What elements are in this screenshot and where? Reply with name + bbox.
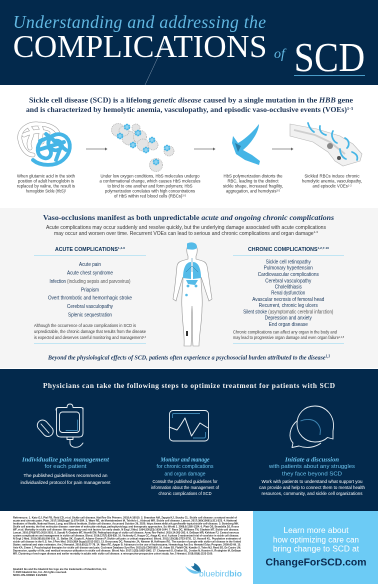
references: sickle cell disease in the U.S. Am J Prev Med. 2010;38(4 Suppl):S512-S521. 13. Brousseau DC, Panepinto JA, Nimmer M, Hoffmann RG. The number of people with sickle-cell disease in the United xyxy=(13,540,242,544)
acute note: Although the occurrence of acute complications in SCD is xyxy=(34,323,136,328)
step: monitor and manage: and organ damage xyxy=(164,471,206,477)
header banner xyxy=(0,0,378,85)
chronic list xyxy=(243,260,334,328)
chronic list: Silent stroke (asymptomatic cerebral infarction) xyxy=(243,309,334,315)
acute note: is expected and deserves careful monitoring and management1,3 xyxy=(34,335,147,340)
panel: vaso-occlusions xyxy=(0,208,378,368)
step 4 caption: Sickled RBCs induce chronic xyxy=(304,173,360,178)
step: monitor and manage: chronic complications of SCD xyxy=(158,491,212,496)
references: acute and chronic pain. Pain. 2017;158(Suppl 1):S79-S84. 3. Ware RE, de Montalembert M, Tshilolo L, Abboud MR. Sickle cell disease. Lancet. 2017;390(10091):311-323. 4. National xyxy=(13,520,237,522)
acute heading: ACUTE COMPLICATIONS1,4-6 xyxy=(55,246,125,253)
legal footer: © 2020 bluebird bio, Inc. All rights reserved. xyxy=(13,571,67,574)
chronic note: may lead to progressive organ damage and even organ failure1,2,8 xyxy=(233,335,345,340)
chronic list: Avascular necrosis of femoral head xyxy=(252,297,324,303)
intro text: Sickle cell disease (SCD) is a lifelong genetic disease caused by a single mutation in the HBB gene xyxy=(29,96,353,104)
step: monitor and manage: information about the management of xyxy=(151,485,220,490)
icon: speech bubbles xyxy=(290,406,334,448)
step 4 caption: hemolytic anemia, vasculopathy, xyxy=(302,178,362,183)
legal footer: bluebird bio and the bluebird bio logo are the trademarks of bluebird bio, Inc. xyxy=(13,568,107,571)
psychosocial burden statement: Beyond the physiological effects of SCD, patients often experience a psychosocial burden attributed to the disease1,3 xyxy=(47,353,330,362)
step 1 caption xyxy=(17,173,76,193)
step 4 caption xyxy=(302,173,362,188)
references: N Engl J Med. 2019;381(6):509-519. 11. Ballas SK, Gupta K, Adams-Graves P. Sickle cell pain: a critical reappraisal. Blood. 2012;120(18):3723-3731. 12. Hassell KL. Population estimates of xyxy=(13,538,241,540)
acute note xyxy=(34,323,147,340)
chronic list: Recurrent, chronic leg ulcers xyxy=(259,303,318,309)
acute list: Overt thrombotic and hemorrhagic stroke xyxy=(48,296,132,302)
icon: patient monitor xyxy=(169,410,208,441)
step 1 caption: hemoglobin Sickle (HbS)3 xyxy=(26,188,66,193)
call to action box: bring change to SCD at xyxy=(273,545,360,554)
icon: human body xyxy=(173,242,212,346)
step 3 caption: HbS polymerization distorts the xyxy=(224,173,283,178)
acute list: Infection (including sepsis and parvovirus) xyxy=(50,279,131,285)
call to action box: ChangeForSCD.com xyxy=(266,558,367,568)
panel: physician steps xyxy=(0,369,378,511)
intro text xyxy=(26,96,353,114)
step 1 caption: replaced by valine, the result is xyxy=(17,183,75,188)
intro text: and is characterized by hemolytic anemia, vasculopathy, and episodic vaso-occlusive events (VOEs) 1-3 xyxy=(26,106,353,114)
references: system complications and management in sickle cell disease. Blood. 2016;127(7):829-838. 10. Vichinsky E, Hoppe CC, Ataga KI, et al. A phase 3 randomized trial of voxelotor in sickle cell disease. xyxy=(13,534,239,538)
step: initiate a discussion: can provide and help to connect them to mental health xyxy=(259,485,365,490)
call to action box: how optimizing care can xyxy=(273,535,359,544)
acute list: Acute pain xyxy=(79,262,101,268)
legal footer: SCD-US-00090 11/2020 xyxy=(13,575,48,577)
call to action box xyxy=(253,511,378,584)
chronic list: Renal dysfunction xyxy=(271,291,305,297)
references: Sickle cell anemia, the first molecular disease: overview of molecular etiology, pathophysiology, and therapeutic approaches. Sci World J. 2008;8:1295-1324. 6. Platt OS, Brambilla DJ, Rosse xyxy=(13,526,240,528)
icon: hemoglobin molecule xyxy=(20,124,70,165)
references: WF, et al. Mortality in sickle cell disease: life expectancy and risk factors for early death. N Engl J Med. 1994;330(23):1639-1644. 7. Rees DC, Williams TN, Gladwin MT. Sickle-cell disease. xyxy=(13,528,239,532)
icon: blood vessel with sickled cells xyxy=(290,123,362,166)
panel heading: Vaso-occlusions manifest as both unpredictable acute and ongoing chronic complications xyxy=(43,213,334,222)
acute list: Cerebral vasculopathy xyxy=(67,304,113,310)
chronic note xyxy=(233,330,345,340)
acute list xyxy=(48,262,132,318)
step: monitor and manage: Consult the published guidelines for xyxy=(152,479,218,484)
icon: IV bag and pill xyxy=(35,404,83,447)
references: References: 1. Kato GJ, Piel FB, Reid CD, et al. Sickle cell disease. Nat Rev Dis Primers. 2018;4:18010. 2. Brandow AM, Zappia KJ, Stucky CL. Sickle cell disease: a natural model of xyxy=(13,516,237,520)
step 3 caption: aggregation, and hemolysis3-5 xyxy=(226,188,281,193)
bluebird bio logo: bluebirdbio xyxy=(199,570,242,578)
title word: of: of xyxy=(274,47,287,62)
chronic list: Cholelithiasis xyxy=(275,284,302,290)
panel intro xyxy=(46,225,326,237)
step 2 caption: a conformational change, which causes HbS molecules xyxy=(100,178,200,183)
step: pain management: individualized protocol for pain management xyxy=(20,480,111,485)
acute list: Splenic sequestration xyxy=(68,312,112,318)
chronic list: Pulmonary hypertension xyxy=(264,266,313,272)
step: initiate a discussion: resources, community, and sickle cell organizations xyxy=(262,491,363,496)
title word: SCD: SCD xyxy=(294,34,365,80)
step 2 caption: to bind to one another and form polymers; HbS xyxy=(108,183,193,188)
panel intro: may occur and worsen over time. Recurrent VOEs can lead to serious and chronic complications and organ damage 1-3 xyxy=(54,230,318,237)
acute complications column xyxy=(34,246,147,344)
acute list: Acute chest syndrome xyxy=(67,270,113,276)
step 1 caption: position of adult hemoglobin is xyxy=(18,178,74,183)
step: initiate a discussion xyxy=(259,456,365,496)
chronic complications column xyxy=(233,246,345,344)
chronic list: Cerebral vasculopathy xyxy=(265,278,312,284)
chronic heading: CHRONIC COMPLICATIONS1,2,7-10 xyxy=(248,246,329,253)
references: MR. Clustering of end-organ disease and earlier mortality in adults with sickle cell disease: a retrospective-prospective cohort study. Am J Hematol. 2018;93(9):1153-1160. xyxy=(13,552,213,556)
icon: HbS polymers xyxy=(112,124,174,172)
references: Anie KA, Green J. Psychological therapies for sickle cell disease and pain. Cochrane Database Syst Rev. 2015;(5):CD001916. 16. Adam SS, Flahiff CM, Kamble S, Telen MJ, Reed SD, De Castro LM. xyxy=(13,546,241,550)
references: Lancet. 2010;376(9757):2018-2031. 8. Sundd P, Gladwin MT, Novelli EM. Pathophysiology of sickle cell disease. Annu Rev Pathol. 2019;14:263-292. 9. DeBaun MR, Kirkham FJ. Central nervous xyxy=(13,532,240,534)
references: States: national and state estimates. Am J Hematol. 2010;85(1):77-78. 14. Ware RE, Aygun B. Advances in the use of hydroxyurea. Hematology Am Soc Hematol Educ Program. 2009:62-69. 15. xyxy=(13,544,241,546)
step: initiate a discussion: with patients about any struggles xyxy=(268,464,355,470)
step: monitor and manage: for chronic complications xyxy=(156,464,214,470)
references: Depression, quality of life, and medical resource utilization in sickle cell disease. Blood Adv. 2017;1(23):1983-1992. 17. Chaturvedi S, Ghafuri DL, Jordan N, Kassim A, Rodeghier M, DeBaun xyxy=(13,550,242,552)
step: pain management: for each patient xyxy=(44,464,87,470)
legal footer xyxy=(13,568,107,577)
step 1 caption: When glutamic acid in the sixth xyxy=(17,173,76,178)
step: initiate a discussion: Work with patients to understand what support you xyxy=(262,479,363,484)
step: monitor and manage xyxy=(151,456,220,496)
physician steps heading: Physicians can take the following steps to optimize treatment for patients with SCD xyxy=(43,381,335,390)
arrow 3 xyxy=(272,148,294,150)
step 2 caption: Under low oxygen conditions, HbS molecules undergo xyxy=(100,173,200,178)
step: monitor and manage: Monitor and manage xyxy=(160,456,210,463)
step 3 caption xyxy=(223,173,283,193)
acute list: Priapism xyxy=(81,287,99,293)
chronic note: Chronic complications can affect any organ in the body and xyxy=(233,330,338,334)
step: initiate a discussion: they face beyond SCD xyxy=(282,471,342,477)
chronic list: End organ disease xyxy=(269,322,308,328)
step 2 caption: polymerization correlates with high concentrations xyxy=(105,188,195,193)
step: pain management: Individualize pain management xyxy=(21,456,109,463)
step 2 caption: of HbS within red blood cells (RBCs)3-5 xyxy=(114,193,187,198)
chronic list: Cardiovascular complications xyxy=(258,272,319,278)
chronic list: Depression and anxiety xyxy=(265,316,312,322)
icon: sickled red blood cell xyxy=(232,124,260,165)
bluebird bio logo xyxy=(185,563,242,578)
step 2 caption xyxy=(100,173,200,198)
step 3 caption: sickle shape, increased fragility, xyxy=(223,183,283,188)
panel intro: Acute complications may occur suddenly and resolve quickly, but the underlying damage associated with acute complications xyxy=(46,225,326,231)
references xyxy=(13,516,242,556)
step 3 caption: RBC, leading to the distinct xyxy=(228,178,279,183)
title line 2: COMPLICATIONS xyxy=(13,28,267,64)
call to action box: Learn more about xyxy=(284,526,349,535)
arrow 1 xyxy=(86,148,108,150)
step 4 caption: and episodic VOEs1-3 xyxy=(312,183,352,188)
arrow 2 xyxy=(194,148,216,150)
step: initiate a discussion: Initiate a discussion xyxy=(284,456,339,463)
title line 1: Understanding and addressing the xyxy=(13,12,266,32)
lungs and organs xyxy=(183,242,201,296)
step: pain management: The published guidelines recommend an xyxy=(24,473,108,478)
step: pain management xyxy=(20,456,111,485)
references: Institutes of Health, National Heart, Lung, and Blood Institute. Sickle cell disease. Accessed October 29, 2020. https://www.nhlbi.nih.gov/health-topics/sickle-cell-disease. 5. Steinberg MH. xyxy=(13,522,239,526)
chronic list: Sickle cell retinopathy xyxy=(266,260,311,266)
acute note: unpredictable, the chronic damage that results from the disease xyxy=(34,329,147,334)
